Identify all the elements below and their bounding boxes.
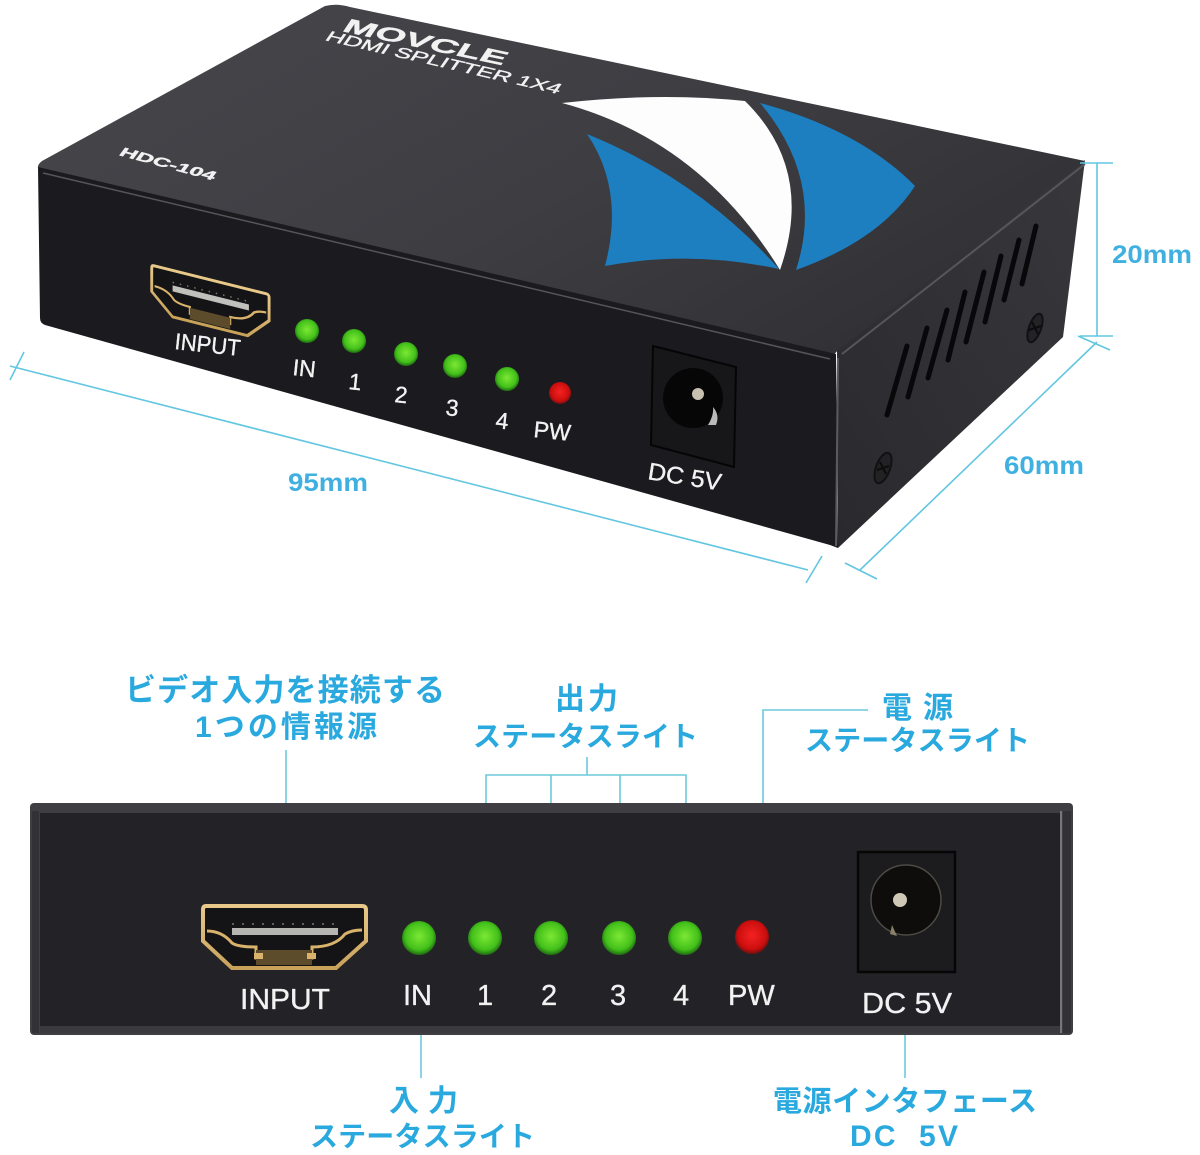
HDMI port [152, 265, 269, 341]
callout: output status lights: ステータスライト [473, 721, 698, 752]
callout: power status light: ステータスライト [805, 725, 1030, 756]
dimension: 60mm [845, 336, 1110, 579]
dimension: 20mm [1080, 163, 1192, 336]
callout: video input source: ビデオ入力を接続する [125, 673, 445, 708]
callout: video input source: 1つの情報源 [195, 711, 377, 744]
callout: power status light: 電 源 [882, 692, 953, 725]
LED row [295, 319, 571, 404]
LED labels: PW [728, 980, 775, 1012]
callout: video input source [125, 673, 445, 803]
bottom front-view device [30, 803, 1073, 1035]
DC label: DC 5V [862, 988, 953, 1020]
callout: input status light [310, 1035, 535, 1152]
power label: DC 5V [646, 458, 723, 497]
INPUT label: INPUT [240, 984, 330, 1016]
device front face [38, 167, 838, 548]
callout: power interface: DC 5V [850, 1120, 958, 1153]
vent slots [887, 226, 1036, 415]
front panel [40, 813, 1061, 1032]
LED labels: PW [532, 416, 572, 446]
LED labels: 4 [673, 980, 689, 1012]
callout: power interface: 電源インタフェース [773, 1085, 1037, 1118]
dimension: 60mm: 60mm [1004, 452, 1084, 480]
callout: power status light [763, 692, 1030, 803]
dimension: 95mm: 95mm [288, 469, 368, 497]
LED labels [403, 980, 775, 1012]
callout: input status light: ステータスライト [310, 1121, 535, 1152]
power jack [651, 346, 736, 467]
LED labels: 1 [347, 368, 363, 395]
callout: power interface [773, 1035, 1037, 1153]
device top face [38, 5, 1085, 356]
LEDs [402, 920, 769, 955]
LED labels: 3 [610, 980, 626, 1012]
callout: output status lights [473, 683, 698, 803]
outer casing [30, 803, 1073, 1035]
LED labels: 4 [494, 407, 510, 434]
LED labels [291, 354, 572, 446]
callout: input status light: 入 力 [389, 1085, 458, 1118]
dimension: 95mm [10, 352, 822, 583]
LED labels: IN [403, 980, 432, 1012]
top product device [38, 5, 1085, 548]
dimension: 20mm: 20mm [1112, 241, 1192, 269]
product name text: HDMI SPLITTER 1X4 [322, 29, 566, 98]
device side face [837, 160, 1085, 548]
power jack [858, 852, 955, 972]
LED labels: 2 [393, 381, 409, 408]
brand text: MOVCLE [338, 16, 513, 70]
screws [871, 312, 1046, 485]
front labels: INPUT [173, 328, 242, 361]
LED labels: IN [291, 354, 317, 382]
LED labels: 1 [477, 980, 493, 1012]
HDMI port [203, 906, 366, 968]
model text: HDC-104 [116, 145, 221, 183]
LED labels: 3 [444, 394, 460, 421]
logo [562, 97, 915, 270]
LED labels: 2 [541, 980, 557, 1012]
callout: output status lights: 出力 [555, 683, 618, 716]
